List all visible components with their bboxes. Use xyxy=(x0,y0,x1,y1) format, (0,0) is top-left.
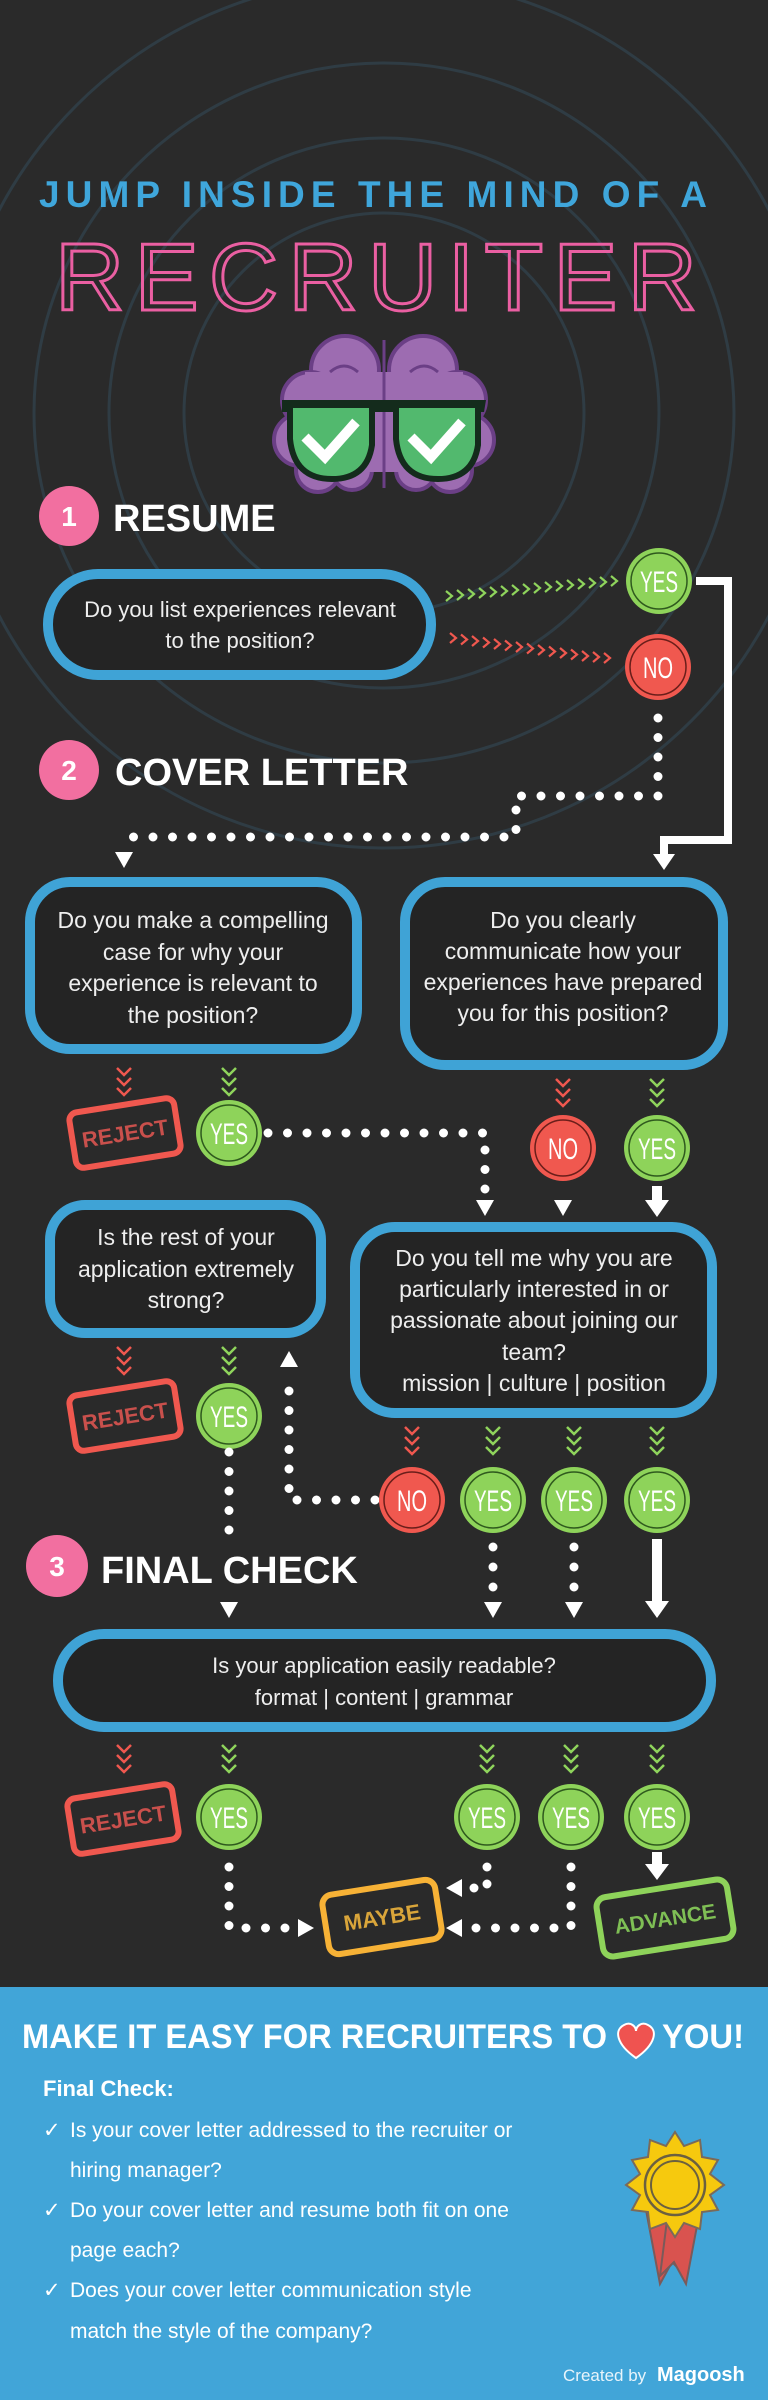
answers row: final check xyxy=(196,1784,690,1850)
stamp: reject 1: REJECT xyxy=(80,1114,170,1153)
box: compelling case: Do you make a compelling xyxy=(57,907,329,933)
arrows: red chevrons to no xyxy=(450,633,610,663)
box: resume question: Do you list experiences relevant xyxy=(84,597,396,622)
heading: make it easy: YOU! xyxy=(662,2018,744,2056)
stamp: reject 1 xyxy=(68,1097,182,1169)
stamp: reject 2: REJECT xyxy=(80,1397,170,1436)
answers row: final check: YES xyxy=(468,1802,506,1835)
answer: yes (resume): YES xyxy=(640,566,678,599)
text: final check list: hiring manager? xyxy=(70,2159,222,2182)
box: rest of application: Is the rest of your xyxy=(97,1224,275,1250)
answer: yes 3 xyxy=(196,1383,262,1449)
heading: 1 resume: 1 xyxy=(61,501,77,532)
text: final check list: ✓ xyxy=(43,2119,61,2142)
heading: 2 cover letter: COVER LETTER xyxy=(115,752,408,794)
stamp: advance: ADVANCE xyxy=(613,1900,718,1939)
heading: 2 cover letter: 2 xyxy=(61,755,77,786)
box: rest of application: application extremely xyxy=(78,1256,295,1282)
chevrons: under cover letter boxes xyxy=(117,1068,664,1106)
box: compelling case: case for why your xyxy=(103,939,283,965)
answers row: passionate: YES xyxy=(474,1485,512,1518)
box: clearly communicate: Do you clearly xyxy=(490,907,636,933)
answers row: passionate: YES xyxy=(555,1485,593,1518)
heading: 2 cover letter xyxy=(39,740,408,800)
box: passionate about joining: passionate about joining our xyxy=(390,1307,678,1333)
icon: award ribbon xyxy=(626,2132,724,2284)
box: rest of application: strong? xyxy=(148,1287,224,1313)
box: passionate about joining: mission | culture | position xyxy=(402,1370,666,1396)
heading: 1 resume: RESUME xyxy=(113,498,276,540)
arrows: green chevrons to yes xyxy=(446,576,617,601)
answer: yes 3: YES xyxy=(210,1401,248,1434)
box: clearly communicate: communicate how your xyxy=(445,938,682,964)
text: final check list: match the style of the company? xyxy=(70,2320,372,2343)
text: final check list xyxy=(43,2076,512,2343)
heading: 3 final check: FINAL CHECK xyxy=(101,1550,358,1592)
box: passionate about joining xyxy=(355,1227,712,1413)
heading: 1 resume xyxy=(39,486,276,546)
answers row: passionate: YES xyxy=(638,1485,676,1518)
text: final check list: ✓ xyxy=(43,2199,61,2222)
box: compelling case xyxy=(30,882,357,1049)
arrows: into final check box xyxy=(220,1452,669,1618)
text: final check list: Do your cover letter and resume both fit on one xyxy=(70,2199,509,2222)
title: recruiter: RECRUITER xyxy=(55,224,697,331)
answer: no (resume): NO xyxy=(643,652,673,685)
stamp: maybe: MAYBE xyxy=(342,1899,422,1936)
stamp: reject 2 xyxy=(68,1380,182,1452)
chevrons: under final box xyxy=(117,1745,664,1772)
stamp: reject 3: REJECT xyxy=(78,1800,168,1839)
text: final check list: Is your cover letter addressed to the recruiter or xyxy=(70,2119,512,2142)
answer: yes 2: YES xyxy=(210,1118,248,1151)
box: clearly communicate xyxy=(405,882,723,1065)
answer: no (resume) xyxy=(625,634,691,700)
title: jump inside the mind of a: JUMP INSIDE THE MIND OF A xyxy=(39,174,707,215)
box: easily readable: Is your application easily readable? xyxy=(212,1653,556,1678)
answer: yes (right box): YES xyxy=(638,1133,676,1166)
answers row: passionate xyxy=(379,1467,690,1533)
arrow: dotted no back up to rest box xyxy=(280,1351,375,1500)
heading: 3 final check xyxy=(26,1535,358,1597)
text: created by magoosh: Created by xyxy=(563,2366,647,2385)
stamp: advance xyxy=(595,1878,735,1958)
box: passionate about joining: team? xyxy=(502,1339,566,1365)
box: resume question xyxy=(48,574,431,675)
text: created by magoosh xyxy=(563,2364,745,2386)
box: passionate about joining: Do you tell me why you are xyxy=(395,1245,673,1271)
box: passionate about joining: particularly interested in or xyxy=(399,1276,669,1302)
text: created by magoosh: Magoosh xyxy=(657,2364,745,2386)
chevrons: under rest and passionate boxes xyxy=(117,1347,664,1454)
answers row: passionate: NO xyxy=(397,1485,427,1518)
text: final check list: Final Check: xyxy=(43,2076,174,2101)
box: easily readable: format | content | grammar xyxy=(255,1685,513,1710)
text: final check list: Does your cover letter communication style xyxy=(70,2279,472,2302)
arrow: yes bracket to right box xyxy=(653,581,728,870)
answer: no (right box): NO xyxy=(548,1133,578,1166)
text: final check list: ✓ xyxy=(43,2279,61,2302)
answer: yes (right box) xyxy=(624,1115,690,1181)
box: easily readable xyxy=(58,1634,711,1727)
box: clearly communicate: you for this position? xyxy=(458,1000,668,1026)
box: resume question: to the position? xyxy=(165,628,315,653)
arrow: dotted yes2 to passionate box xyxy=(268,1133,494,1216)
arrow: dotted no path to left box xyxy=(115,718,658,868)
icon: brain with glasses xyxy=(274,336,494,492)
arrow: no to passionate box xyxy=(554,1200,572,1216)
heading: 3 final check: 3 xyxy=(49,1551,65,1582)
box: clearly communicate: experiences have prepared xyxy=(424,969,702,995)
text: final check list: page each? xyxy=(70,2239,180,2262)
stamp: maybe xyxy=(321,1878,443,1956)
box: rest of application xyxy=(50,1205,321,1333)
answers row: final check: YES xyxy=(638,1802,676,1835)
box: compelling case: experience is relevant to xyxy=(68,970,318,996)
stamp: reject 3 xyxy=(66,1783,180,1855)
answer: yes 2 xyxy=(196,1100,262,1166)
arrow: yes to passionate box xyxy=(645,1186,669,1217)
arrows: to maybe and advance xyxy=(229,1852,669,1937)
box: compelling case: the position? xyxy=(128,1002,258,1028)
answers row: final check: YES xyxy=(552,1802,590,1835)
answer: yes (resume) xyxy=(626,548,692,614)
heading: make it easy: MAKE IT EASY FOR RECRUITERS TO xyxy=(22,2018,607,2056)
answer: no (right box) xyxy=(530,1115,596,1181)
panel: tips section xyxy=(0,1987,768,2400)
answers row: final check: YES xyxy=(210,1802,248,1835)
